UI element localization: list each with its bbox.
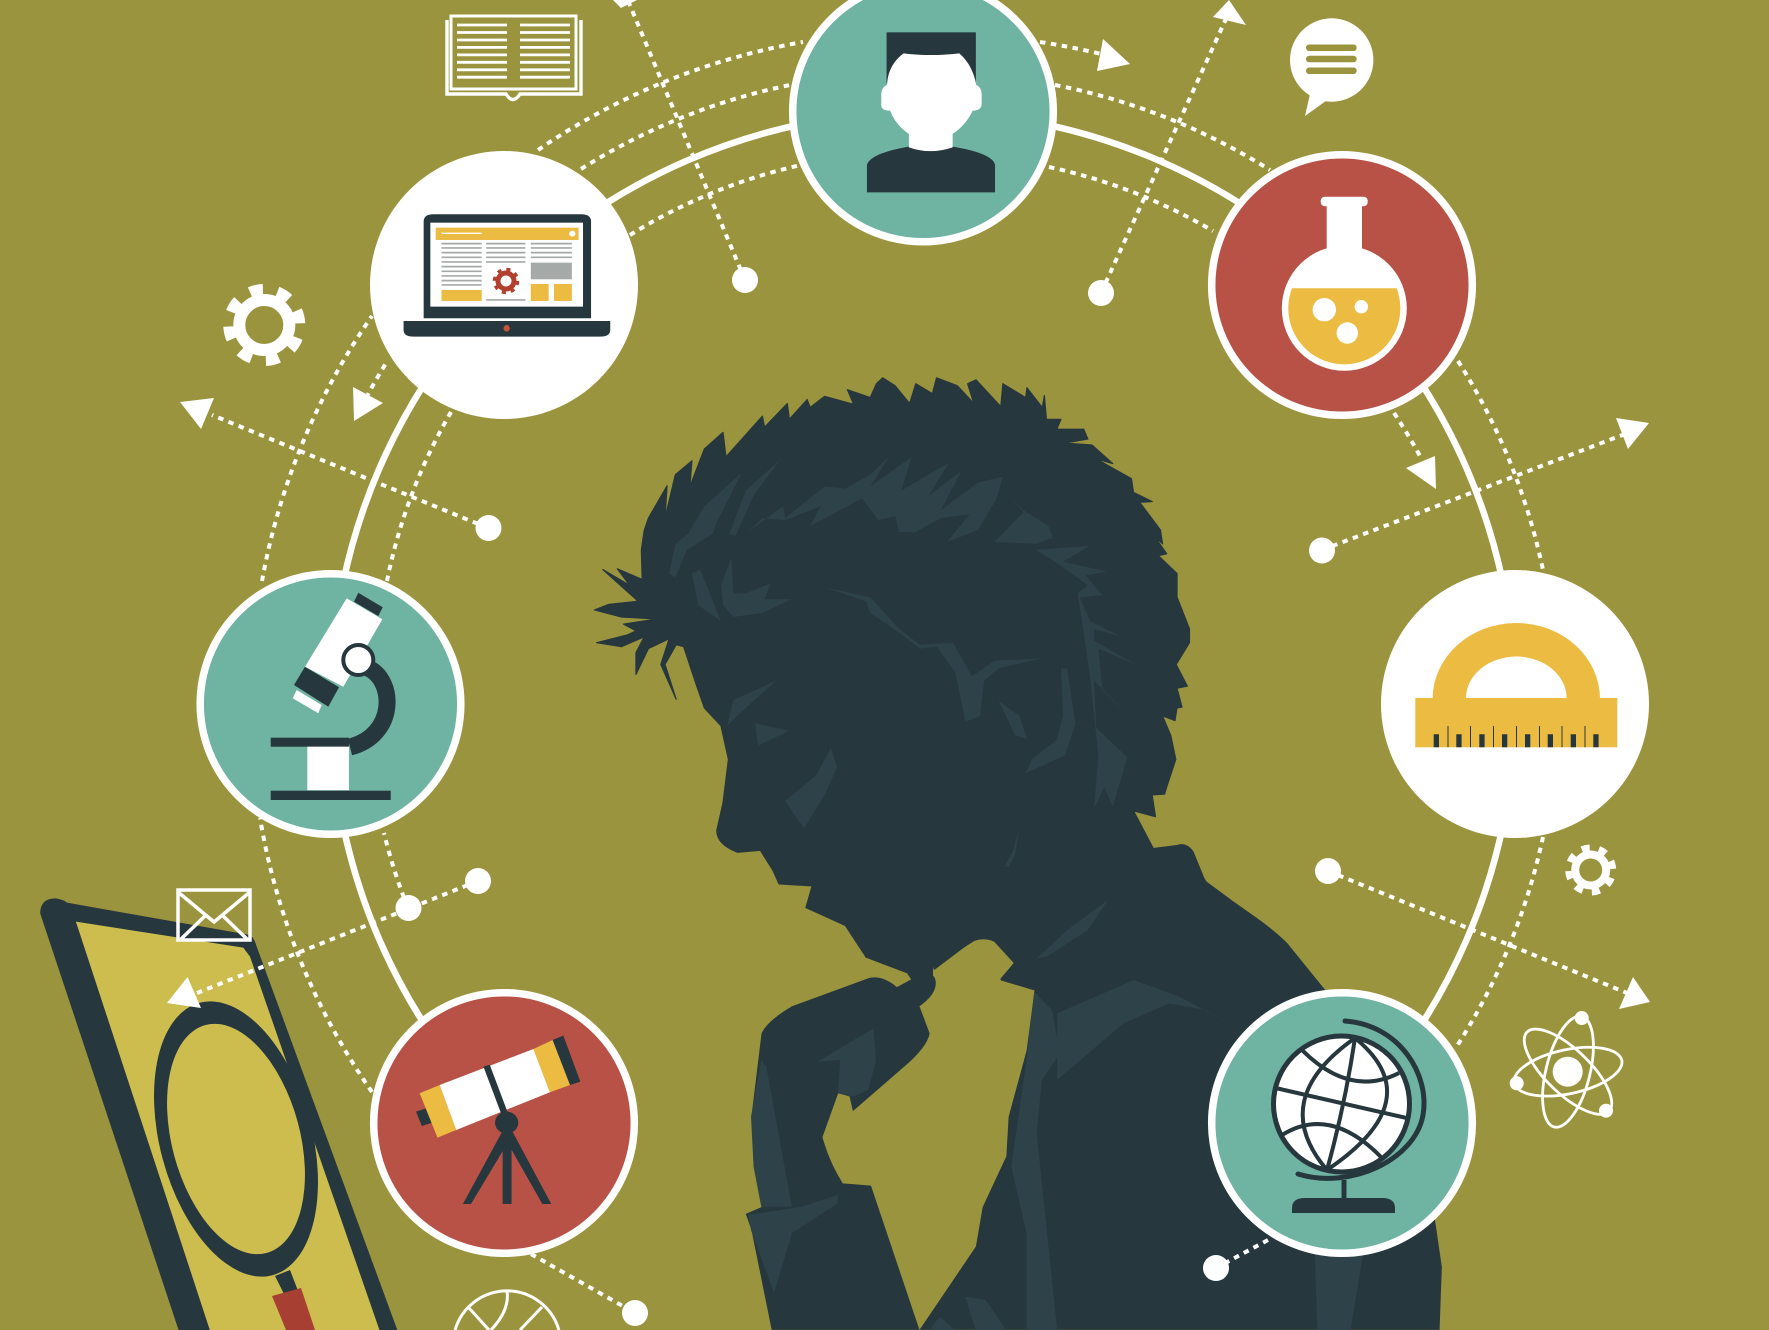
icon: speech bubble (1290, 18, 1373, 116)
arrow: right radial (1309, 418, 1649, 564)
silhouette torso and arm (746, 844, 1442, 1330)
connector: globe to dot (1203, 1240, 1268, 1281)
dotted orbit arcs (260, 42, 1543, 1092)
panel: laptop circle (370, 151, 638, 419)
solid orbit ring (330, 112, 1516, 1123)
icon: telescope (416, 1036, 580, 1204)
magnifier handle (272, 1270, 315, 1330)
arrow: lower right radial (1315, 858, 1650, 1009)
icon: laptop gear (494, 270, 518, 292)
magnifier lens (126, 983, 346, 1295)
arrow: left radial (180, 398, 502, 541)
arrow: top right radial (1088, 0, 1246, 306)
arrow: top left radial (613, 0, 758, 293)
tablet frame (40, 898, 397, 1330)
panel: protractor circle (1381, 570, 1649, 838)
icon: laptop (404, 214, 610, 337)
silhouette clothing highlights (748, 900, 1363, 1330)
panel: telescope circle (374, 993, 634, 1253)
icon: envelope (178, 890, 250, 940)
icon: flask (1282, 197, 1407, 371)
panel: microscope circle (200, 574, 461, 834)
icon: small gear (1562, 841, 1620, 899)
icon: microscope (271, 593, 391, 800)
icon: globe (1274, 1021, 1424, 1213)
connector: telescope to dot (531, 1254, 648, 1326)
icon: large gear (218, 279, 311, 371)
icon: basketball (455, 1291, 559, 1330)
icon: atom (1510, 1011, 1626, 1132)
tablet with magnifier (40, 898, 397, 1330)
icon: open book (447, 16, 581, 100)
silhouette head (595, 378, 1230, 979)
silhouette: thinking person (595, 378, 1442, 1330)
icon: person (867, 32, 995, 192)
icon: protractor (1415, 623, 1617, 747)
panel: person circle (793, 0, 1053, 242)
panel: flask circle (1212, 155, 1472, 415)
panel: globe circle (1212, 993, 1472, 1253)
arrowheads on dotted arcs (353, 39, 1436, 489)
arrow: lower left radial over tablet (167, 868, 491, 1008)
